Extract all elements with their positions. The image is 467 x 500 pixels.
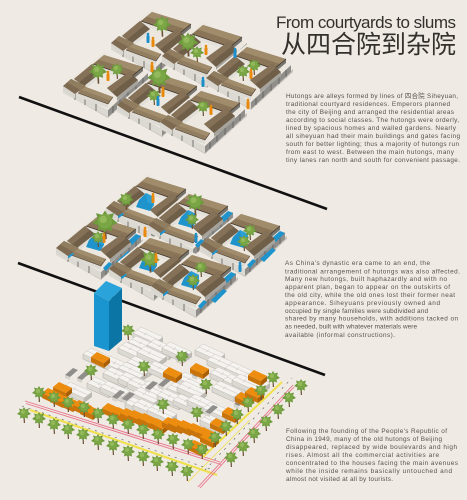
text block: after 1949: concentrated to the houses facing the main avenues	[286, 460, 458, 467]
illustration: street trees	[17, 324, 308, 481]
text block: courtyard era: traditional courtyard residences. Emperors planned	[286, 101, 450, 108]
title: 从四合院到杂院	[281, 25, 456, 61]
text block: end of dynastic era: As China's dynastic era came to an end, the	[285, 260, 430, 267]
text block: end of dynastic era: traditional arrangement of hutongs was also affected.	[285, 268, 460, 276]
illustration: commercial orange houses	[42, 352, 267, 456]
text block: after 1949: rises. Almost all the commercial activities are	[286, 452, 439, 459]
text block: courtyard era: south for better lighting; thus a majority of hutongs run	[286, 141, 459, 148]
text block: courtyard era: according to social classes. The hutongs were orderly,	[286, 117, 459, 124]
illustration: blue high-rise tower	[94, 281, 122, 351]
text block: courtyard era: lined by spacious homes and walled gardens. Nearly	[286, 125, 457, 132]
divider line: first to second stage	[19, 97, 327, 209]
title: From courtyards to slums	[276, 13, 456, 32]
text block: after 1949: disappeared, replaced by wide boulevards and high	[286, 444, 457, 451]
text block: courtyard era	[286, 91, 460, 164]
text block: end of dynastic era: the old city, while the old ones lost their former neat	[285, 292, 455, 299]
text block: end of dynastic era: available (informal constructions).	[285, 332, 395, 339]
illustration: informal white houses	[62, 327, 270, 435]
illustration: orderly courtyard houses	[63, 9, 293, 154]
text block: after 1949: almost not visited at all by tourists.	[286, 476, 393, 483]
text block: courtyard era: from east to west. Between the main hutongs, many	[286, 149, 455, 156]
text block: after 1949: while the inside remains basically untouched and	[285, 468, 452, 475]
text block: courtyard era: Hutongs are alleys formed by lines of 四合院 Siheyuan,	[286, 91, 458, 100]
text block: after 1949	[285, 428, 458, 483]
illustration: subdivided courtyards with blue additions	[56, 174, 287, 318]
text block: courtyard era: all siheyuan had their main buildings and gates facing	[286, 133, 460, 140]
text block: end of dynastic era	[285, 260, 460, 339]
text block: after 1949: Following the founding of the People's Republic of	[286, 428, 447, 435]
text block: end of dynastic era: appearance. Siheyuans previously owned and	[285, 300, 440, 307]
text block: courtyard era: the city of Beijing and arranged the residential areas	[286, 109, 454, 116]
text block: end of dynastic era: Many new hutongs, built haphazardly and with no	[285, 276, 447, 283]
divider line: second to third stage	[18, 263, 325, 375]
illustration: roads	[22, 378, 294, 488]
text block: end of dynastic era: apparent plan, began to appear on the outskirts of	[285, 284, 450, 291]
text block: courtyard era: tiny lanes ran north and south for convenient passage.	[286, 157, 460, 164]
text block: after 1949: China in 1949, many of the old hutongs of Beijing	[286, 436, 442, 443]
text block: end of dynastic era: shared by many households, with additions tacked on	[285, 316, 458, 322]
text block: end of dynastic era: as needed, built with whatever materials were	[285, 324, 417, 330]
text block: end of dynastic era: occupied by single families were subdivided and	[285, 308, 428, 315]
